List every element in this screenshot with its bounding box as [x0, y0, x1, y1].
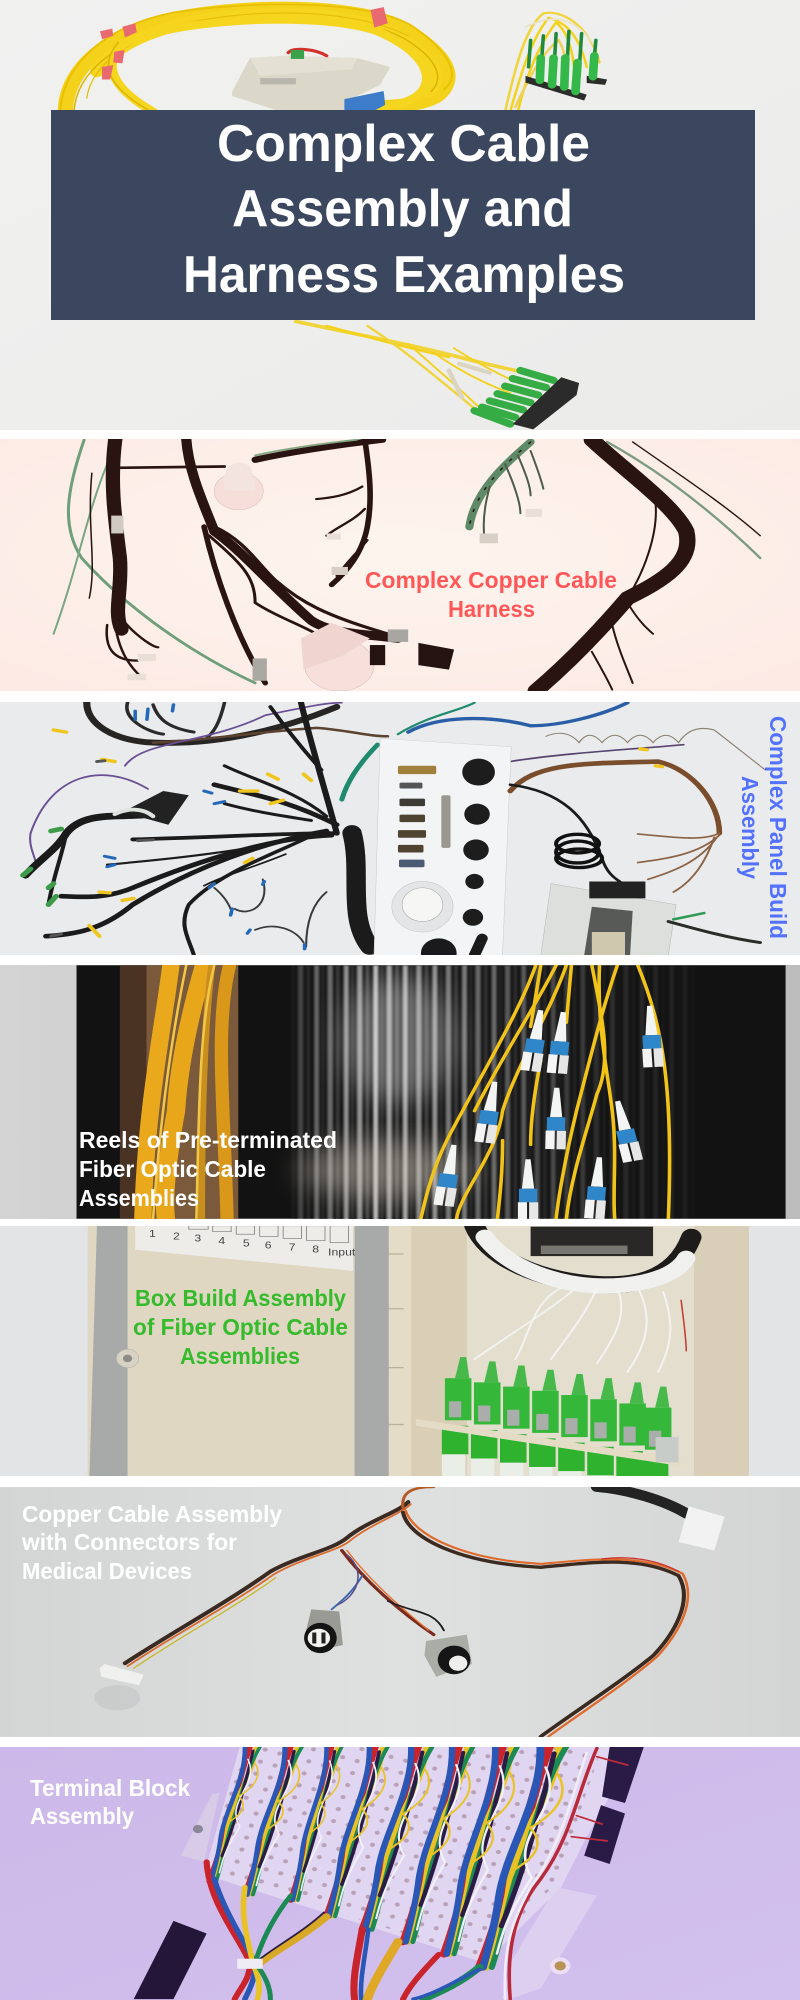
- photo: black copper harness with pink connectors: [54, 439, 760, 691]
- door label numbers: [149, 1229, 356, 1258]
- panel: complex panel build assembly photo: [0, 702, 800, 968]
- panel: box build assembly photo: [0, 1226, 800, 1476]
- title text: Complex Cable: [217, 115, 590, 173]
- title text: [183, 115, 625, 304]
- label: complex copper cable harness: Harness: [448, 596, 535, 622]
- label: complex panel build assembly: Complex Panel Build: [765, 716, 791, 939]
- door label numbers: 2: [173, 1231, 180, 1242]
- panel: reels of pre-terminated fiber photo: [0, 965, 800, 1222]
- panel: copper cable assembly for medical devices photo: [0, 1487, 800, 1737]
- label: terminal block assembly: Assembly: [30, 1803, 134, 1829]
- label: box build assembly: Assemblies: [180, 1343, 300, 1369]
- door label numbers: 1: [149, 1229, 156, 1240]
- panel: complex copper cable harness photo: [0, 439, 800, 691]
- label: complex copper cable harness: Complex Copper Cable: [365, 567, 617, 593]
- door label numbers: 6: [265, 1240, 272, 1251]
- photo: terminal block with colourful wire bundles: [134, 1747, 644, 1999]
- door label numbers: Input: [328, 1248, 356, 1258]
- panel: hero photo of fiber cable assemblies: [0, 0, 800, 430]
- photo: cable reel with yellow fiber and LC connectors: [77, 965, 800, 1222]
- label: reels of pre-terminated fiber: Reels of Pre-terminated: [79, 1127, 337, 1153]
- label: copper cable assembly with connectors for medical devices: Copper Cable Assembly: [22, 1501, 282, 1527]
- label: box build assembly: Box Build Assembly: [135, 1285, 346, 1311]
- label: complex panel build assembly: [737, 716, 791, 939]
- label: reels of pre-terminated fiber: [79, 1127, 337, 1211]
- title text: Assembly and: [232, 180, 573, 238]
- door label numbers: 8: [312, 1245, 319, 1255]
- photo: wire harness and white connector panel: [23, 703, 765, 968]
- label: terminal block assembly: Terminal Block: [30, 1775, 190, 1801]
- label: box build assembly: [133, 1285, 348, 1369]
- label: copper cable assembly with connectors for medical devices: Medical Devices: [22, 1558, 192, 1584]
- door label numbers: 7: [289, 1243, 296, 1253]
- door label numbers: 5: [243, 1238, 250, 1249]
- photo: open enclosure with green fiber connectors: [88, 1226, 749, 1476]
- label: reels of pre-terminated fiber: Fiber Optic Cable: [79, 1156, 266, 1182]
- photo: yellow fiber loops, module and connectors: [60, 4, 607, 429]
- door label numbers: 3: [194, 1233, 201, 1244]
- door label numbers: 4: [218, 1236, 225, 1247]
- title banner: [51, 110, 755, 320]
- panel: terminal block assembly photo: [0, 1747, 800, 2000]
- label: terminal block assembly: [30, 1775, 190, 1829]
- label: reels of pre-terminated fiber: Assemblies: [79, 1185, 199, 1211]
- title text: Harness Examples: [183, 246, 625, 304]
- photo: thin multicolour cable with round connectors: [94, 1487, 724, 1736]
- label: complex panel build assembly: Assembly: [737, 776, 763, 879]
- label: copper cable assembly with connectors for medical devices: [21, 1501, 282, 1584]
- label: copper cable assembly with connectors for medical devices: with Connectors for: [21, 1529, 237, 1555]
- label: box build assembly: of Fiber Optic Cable: [133, 1314, 348, 1340]
- label: complex copper cable harness: [365, 567, 617, 622]
